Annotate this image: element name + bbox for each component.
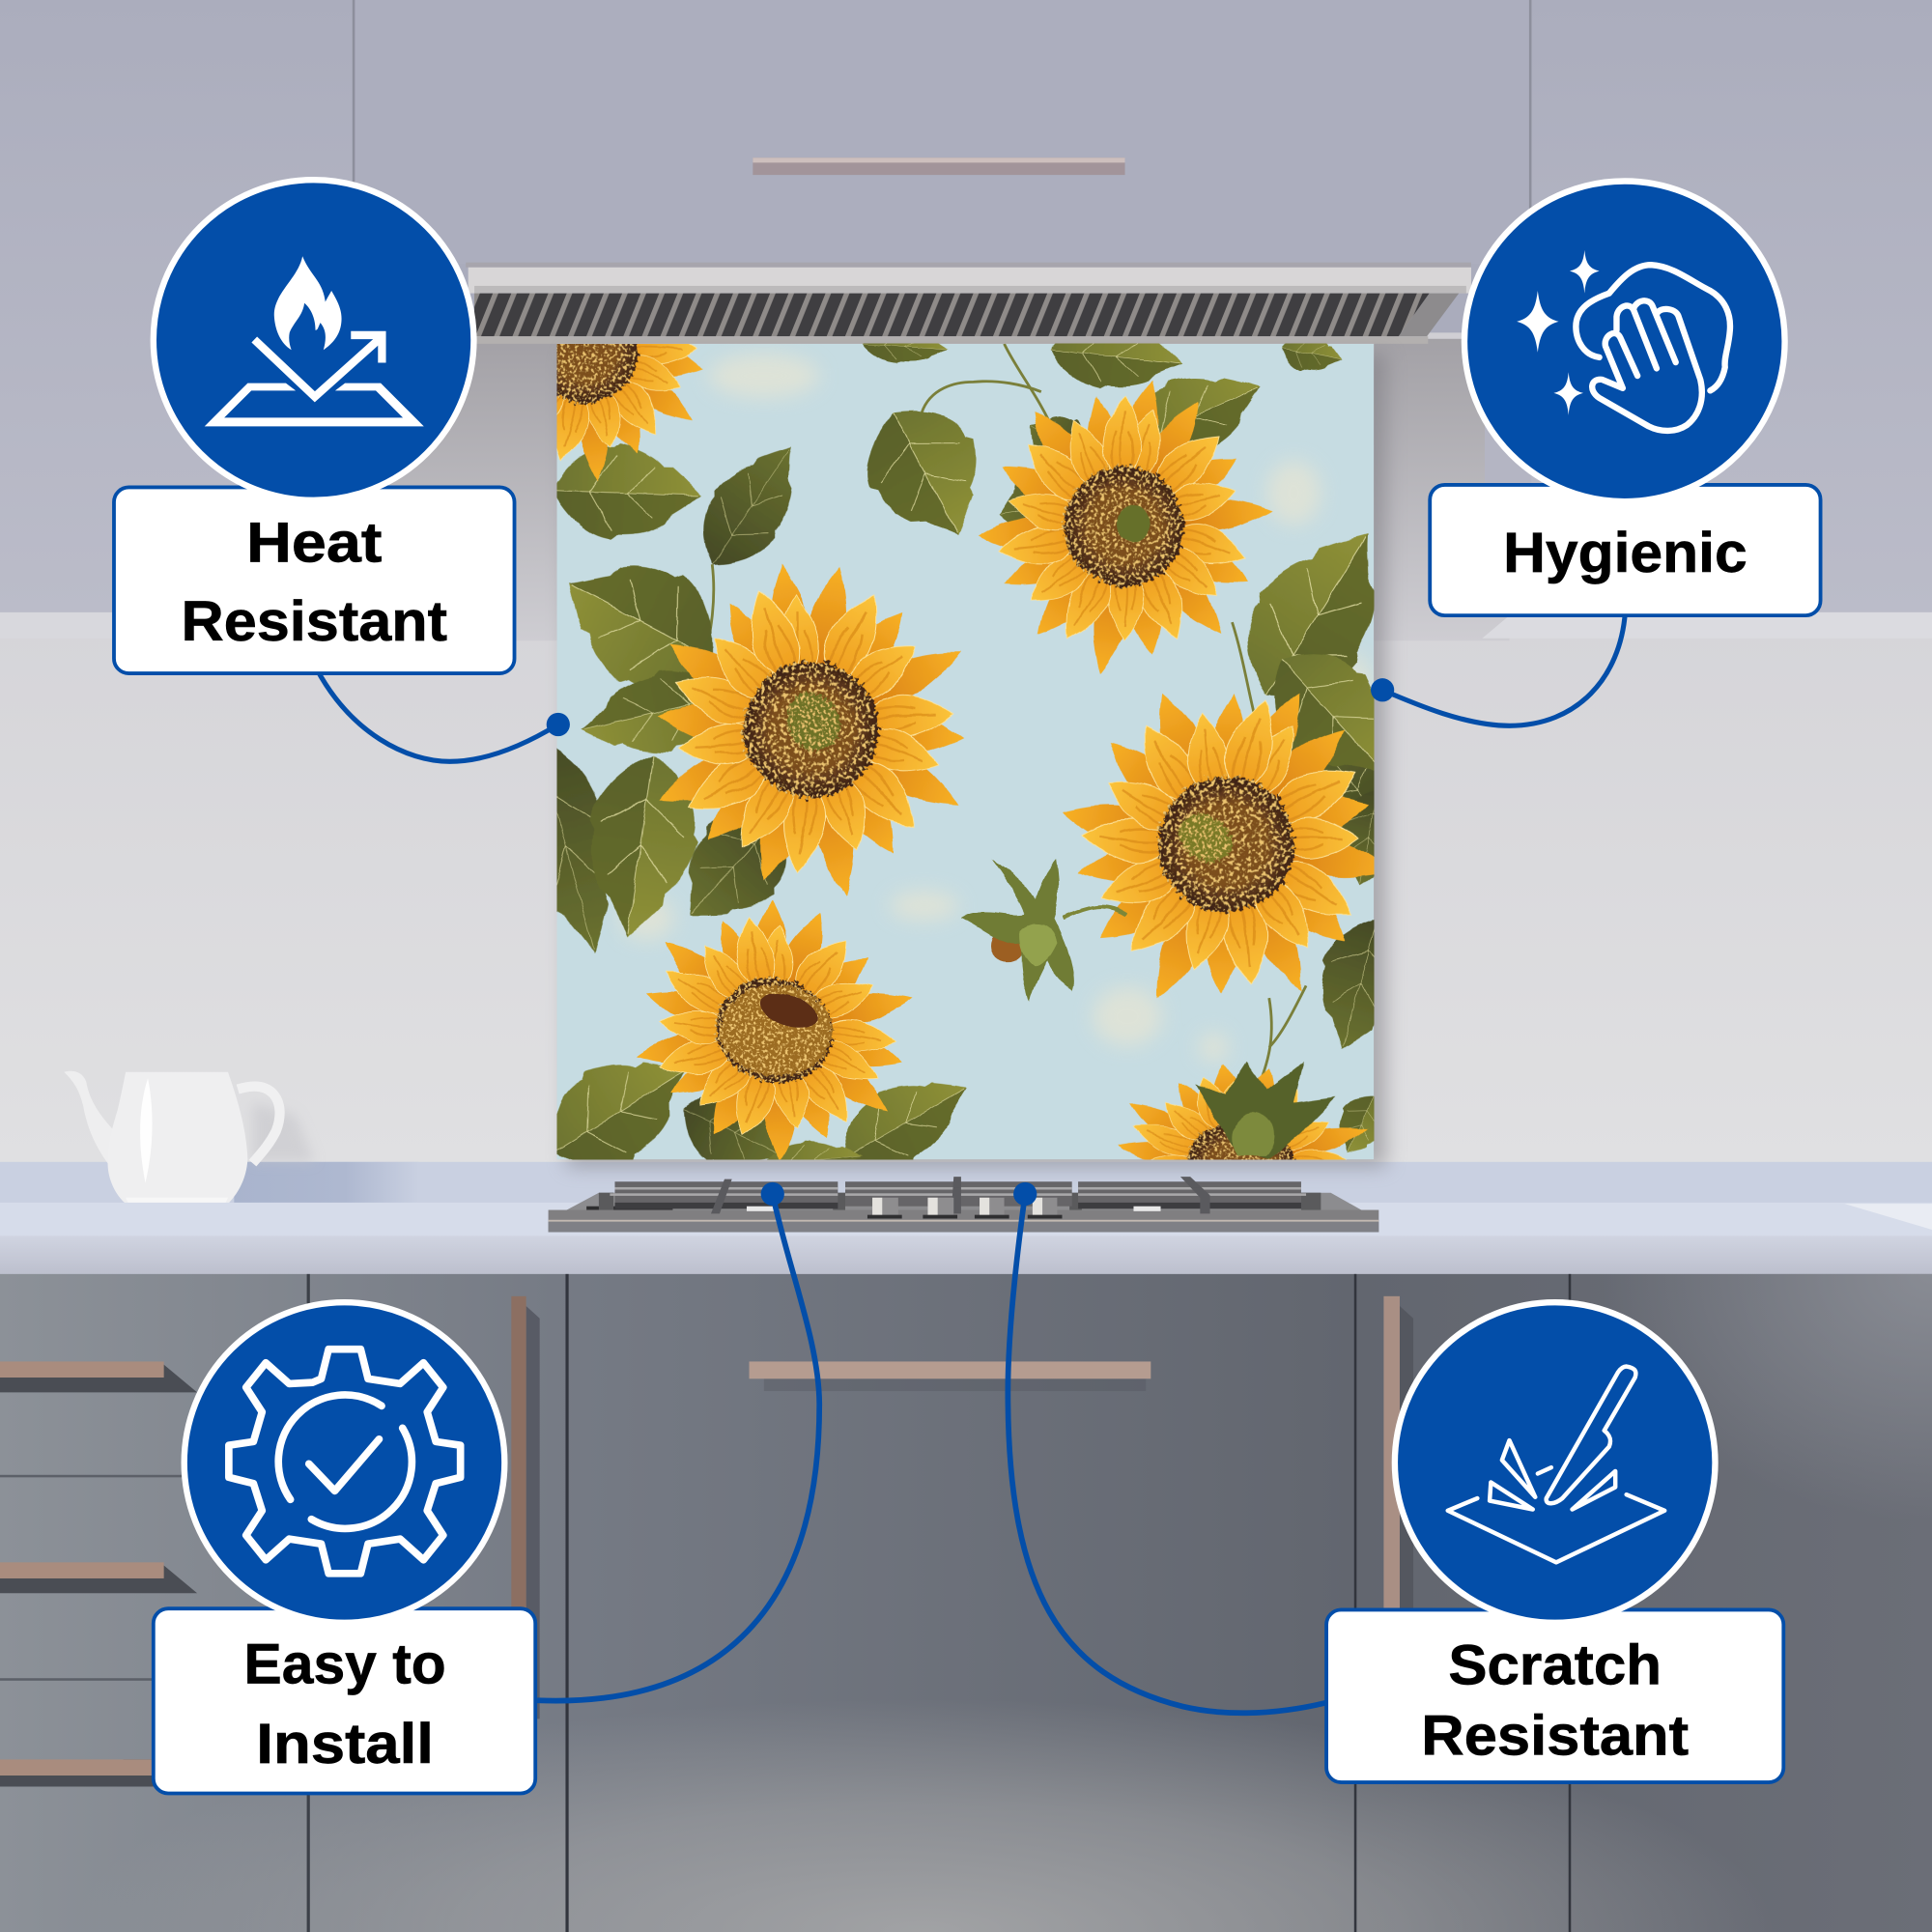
burner grates: [599, 1177, 1321, 1213]
wall shadow beside hood, left: [354, 339, 557, 640]
base cabinets: [0, 1274, 1932, 1932]
counter back band: [0, 1162, 1932, 1204]
connector: scratch resistant: [1008, 1182, 1325, 1713]
label text: easy to install: Easy to: [244, 1633, 446, 1695]
panel shadow: [567, 354, 1386, 1167]
icon: hand wiping with sparkles: [1517, 250, 1730, 431]
countertop: [0, 1203, 1932, 1275]
callout: scratch resistant: [1326, 1302, 1783, 1782]
backing behind hood: [354, 0, 1499, 345]
upper cabinets: [0, 0, 1932, 639]
sunflower: top-right: [978, 381, 1273, 674]
connector: hygienic: [1371, 612, 1625, 725]
sunflower: centre-left large: [657, 564, 964, 896]
painted sky background: [557, 344, 1374, 1159]
cabinet handles: [0, 1296, 1413, 1786]
connector: heat resistant: [317, 669, 570, 761]
callout: hygienic: [1430, 182, 1821, 615]
label box: easy to install: [154, 1608, 535, 1794]
gas hob: [549, 1177, 1378, 1233]
sunflower splashback panel: [556, 344, 1374, 1159]
badge circle: easy to install: [185, 1302, 504, 1623]
label text: easy to install: Install: [256, 1713, 434, 1776]
badge circle: heat resistant: [154, 180, 473, 500]
label text: scratch resistant: Resistant: [1421, 1704, 1689, 1767]
wall: [0, 332, 1932, 1171]
label box: hygienic: [1430, 485, 1821, 615]
icon: flame over surface with reflected arrow: [205, 256, 424, 426]
badge circle: scratch resistant: [1395, 1302, 1716, 1623]
connector: easy to install: [537, 1182, 819, 1701]
label box: scratch resistant: [1326, 1609, 1783, 1782]
label text: hygienic: Hygienic: [1503, 522, 1747, 584]
calyx over bottom-right flower: [1195, 1062, 1337, 1159]
label text: scratch resistant: Scratch: [1448, 1634, 1662, 1697]
sunflower bud: [961, 859, 1127, 1001]
upper cabinet handle: [753, 157, 1125, 175]
control knobs: [867, 1198, 1062, 1218]
label text: heat resistant: Heat: [246, 512, 382, 575]
sunflower: top-left partial: [556, 344, 703, 481]
teapot: [64, 1071, 314, 1208]
sunflower: right large: [1063, 694, 1374, 999]
icon: gear with check mark: [229, 1350, 461, 1574]
wall shadow beside hood, right: [1374, 339, 1509, 640]
cream brush strokes: [620, 354, 1378, 1062]
badge circle: hygienic: [1464, 182, 1785, 501]
sunflower: bottom-right partial: [1119, 1065, 1368, 1159]
icon: knife scratching surface: [1448, 1367, 1664, 1562]
callout: heat resistant: [114, 180, 515, 673]
leaves: [556, 344, 1374, 1159]
sunflower: bottom-left: [637, 899, 912, 1159]
callout: easy to install: [154, 1302, 535, 1794]
cooker hood: [466, 263, 1471, 344]
label box: heat resistant: [114, 487, 515, 673]
stems: [706, 344, 1306, 1084]
label text: heat resistant: Resistant: [182, 590, 447, 653]
